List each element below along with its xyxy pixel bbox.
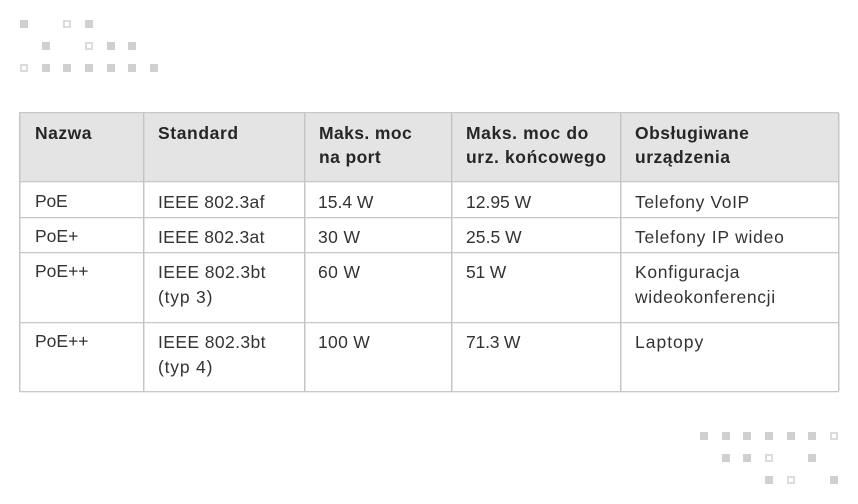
- table: PoE standards: 30 W: [318, 227, 360, 247]
- header: Maks. moc na port: Maks. moc: [319, 123, 412, 143]
- row 4: PoE++ typ 4: PoE++: [35, 331, 89, 351]
- table: PoE standards: IEEE 802.3at: [158, 227, 265, 247]
- header: Maks. moc do urz. końcowego: [466, 123, 607, 167]
- table: PoE standards: 15.4 W: [318, 192, 373, 212]
- table: PoE standards: 25.5 W: [466, 227, 522, 247]
- decorative squares: bottom right: [700, 432, 838, 484]
- table: PoE standards: Telefony IP wideo: [635, 227, 785, 247]
- table: PoE standards: [19, 112, 840, 393]
- table: PoE standards: (typ 3): [158, 287, 213, 307]
- table: PoE standards: IEEE 802.3af: [158, 192, 265, 212]
- header: Maks. moc na port: na port: [319, 147, 381, 167]
- table: PoE standards: IEEE 802.3bt: [158, 332, 266, 352]
- header: Obsługiwane urządzenia: Obsługiwane: [635, 123, 749, 143]
- table: PoE standards: (typ 4): [158, 357, 213, 377]
- header: Obsługiwane urządzenia: urządzenia: [635, 147, 730, 167]
- table: PoE standards: 100 W: [318, 332, 370, 352]
- header: Maks. moc do urz. końcowego: Maks. moc do: [466, 123, 589, 143]
- table: PoE standards: IEEE 802.3bt: [158, 262, 266, 282]
- decorative squares: top left: [20, 20, 158, 72]
- table: PoE standards: Telefony VoIP: [635, 192, 750, 212]
- table: PoE standards: Laptopy: [635, 332, 704, 352]
- header: Nazwa: Nazwa: [35, 123, 92, 143]
- row 3: PoE++ typ 3: PoE++: [35, 261, 89, 281]
- table: PoE standards: 60 W: [318, 262, 360, 282]
- table header background: [20, 113, 838, 181]
- table: PoE standards: 12.95 W: [466, 192, 531, 212]
- row 2: PoE+: PoE+: [35, 226, 78, 246]
- header: Obsługiwane urządzenia: [635, 123, 749, 167]
- table: PoE standards: wideokonferencji: [635, 287, 776, 307]
- table: PoE standards: 51 W: [466, 262, 506, 282]
- table: PoE standards: 71.3 W: [466, 332, 520, 352]
- header: Maks. moc na port: [319, 123, 412, 167]
- header: Maks. moc do urz. końcowego: urz. końcowego: [466, 147, 607, 167]
- table: PoE standards: Konfiguracja: [635, 262, 740, 282]
- row 1: PoE: PoE: [35, 191, 67, 211]
- header: Standard: Standard: [158, 123, 239, 143]
